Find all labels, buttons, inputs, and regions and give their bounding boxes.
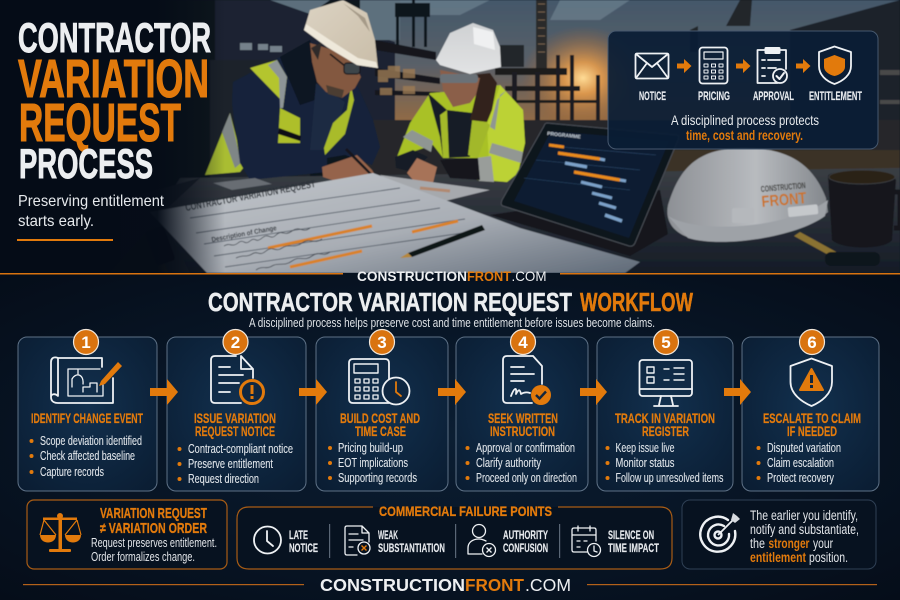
title: REQUEST NOTICE [195, 424, 275, 439]
hand and pen [322, 155, 375, 185]
left fade behind title [0, 0, 225, 273]
item: silence on time impact: SILENCE ON [608, 528, 654, 542]
arrow [796, 59, 810, 73]
icon: notice document with alert [211, 356, 264, 404]
lower section backing [0, 273, 900, 600]
callout: notice to entitlement [608, 31, 878, 149]
vest straps [250, 60, 287, 108]
callout message: A disciplined process protects [671, 112, 819, 128]
face [310, 43, 361, 98]
callout message [671, 112, 819, 143]
footer brand with rules [23, 575, 877, 595]
arrow [736, 59, 750, 73]
message: the [750, 536, 765, 551]
icon: calculator and clock [349, 359, 410, 404]
item: late notice [254, 526, 318, 555]
hero photo: site scene with two engineers [0, 0, 900, 273]
helmet [436, 23, 501, 74]
title [488, 411, 558, 439]
panel heading [100, 506, 207, 537]
badge 6: 6 [807, 333, 817, 352]
bullets: Request direction [188, 472, 259, 486]
panel: commercial failure points [237, 503, 672, 569]
footer brand with rules: CONSTRUCTION [320, 575, 465, 595]
icon: shield [819, 46, 851, 84]
callout message: time, cost and recovery. [686, 127, 803, 143]
title: ESCALATE TO CLAIM [763, 411, 861, 426]
brand strip with rule: .COM [512, 268, 546, 284]
second sheet under the woman's hand [380, 175, 490, 203]
bullets: Contract-compliant notice [188, 442, 293, 456]
bullets [30, 434, 142, 479]
step labels: NOTICE [639, 89, 666, 103]
icon: calculator [700, 48, 728, 84]
bullets: Protect recovery [767, 471, 835, 485]
hair and face [470, 73, 497, 122]
message: entitlement [750, 550, 806, 565]
item: weak substantiation [345, 526, 445, 555]
workflow subheading: A disciplined process helps preserve cost and time entitlement before issues become claims. [249, 316, 655, 330]
far-left building behind man [215, 0, 395, 130]
title: REGISTER [642, 424, 689, 439]
message: notify and substantiate, [750, 522, 859, 537]
title: IF NEEDED [787, 424, 837, 439]
bullets: Preserve entitlement [188, 457, 273, 471]
icon: blueprint with pencil [51, 357, 122, 403]
tablet stand [490, 190, 668, 256]
hero subtitle: starts early. [18, 213, 94, 230]
variation request form [150, 173, 640, 273]
panel heading: VARIATION REQUEST [100, 506, 207, 522]
icon: register monitor [640, 360, 692, 406]
title: ISSUE VARIATION [194, 411, 276, 426]
bullets: EOT implications [338, 456, 408, 470]
pen [408, 225, 485, 257]
footer brand with rules: FRONT [465, 575, 524, 595]
panel: earlier is stronger [682, 500, 876, 569]
badge 3 [370, 330, 394, 354]
bullets: Follow up unresolved items [616, 471, 724, 485]
hero title: PROCESS [19, 140, 153, 187]
icon: target [700, 513, 740, 552]
hand [407, 158, 437, 183]
bullets: Clarify authority [476, 456, 542, 470]
step 3 card [316, 330, 448, 491]
item: silence on time impact [572, 526, 659, 556]
item: silence on time impact: TIME IMPACT [608, 541, 659, 555]
arrows between steps [150, 379, 751, 405]
item: late notice: LATE [289, 528, 308, 542]
steel frames left of woman [375, 40, 440, 96]
bullets: Pricing build-up [338, 441, 403, 455]
bullets: Claim escalation [767, 456, 834, 470]
badge 1: 1 [81, 333, 91, 352]
bullets: Scope deviation identified [40, 434, 142, 448]
workflow heading: CONTRACTOR VARIATION REQUEST [208, 289, 572, 317]
branded hard hat on table: FRONT [761, 190, 807, 211]
icon: shield with warning [790, 358, 832, 406]
message: stronger [768, 536, 810, 551]
badge 4 [510, 330, 536, 354]
step 2 card [167, 330, 306, 491]
item: weak substantiation: WEAK [378, 528, 398, 542]
item: authority confusion: CONFUSION [503, 541, 548, 555]
hero subtitle [18, 193, 165, 230]
man in hard hat [205, 0, 385, 187]
badge 2: 2 [231, 333, 240, 352]
brand strip with rule [0, 268, 900, 284]
bullets: Supporting records [338, 471, 417, 485]
title: TRACK IN VARIATION [615, 411, 715, 426]
workflow heading: WORKFLOW [580, 289, 694, 317]
arrow [677, 59, 692, 73]
panel heading: COMMERCIAL FAILURE POINTS [379, 503, 552, 519]
bullets: Proceed only on direction [476, 471, 577, 485]
mid ground [360, 120, 900, 180]
message: The earlier you identify, [750, 508, 858, 523]
title: IDENTIFY CHANGE EVENT [31, 411, 143, 426]
title [340, 411, 420, 439]
vest back panel [205, 113, 244, 175]
item: weak substantiation: SUBSTANTIATION [378, 541, 445, 555]
panel: request vs order [27, 500, 227, 569]
title: SEEK WRITTEN [488, 411, 558, 426]
badge 3: 3 [377, 333, 387, 352]
hero title: CONTRACTOR [18, 14, 211, 61]
badge 5 [654, 330, 678, 354]
badge 6 [800, 330, 824, 354]
item: authority confusion: AUTHORITY [503, 528, 548, 542]
step labels: ENTITLEMENT [809, 89, 862, 103]
bullets: Check affected baseline [40, 449, 135, 463]
hero title: REQUEST [19, 93, 181, 153]
bullets [178, 442, 293, 486]
hero title [18, 14, 211, 187]
title [194, 411, 276, 439]
item: late notice: NOTICE [289, 541, 318, 555]
bullets: Disputed variation [767, 441, 841, 455]
message: position. [809, 550, 848, 565]
title: TIME CASE [355, 424, 406, 439]
icon: scales [40, 513, 81, 552]
badge 2 [223, 330, 248, 354]
message [750, 508, 859, 565]
brand strip with rule: CONSTRUCTION [357, 268, 467, 284]
tablet with programme gantt: PROGRAMME [547, 131, 582, 141]
hero photo: site scene with two engineers: CONTRACTOR VARIATION REQUEST [185, 179, 316, 214]
badge 5: 5 [661, 333, 671, 352]
tablet with programme gantt [501, 123, 679, 246]
bullets [606, 441, 724, 485]
icon: envelope [636, 54, 668, 78]
step labels [639, 89, 862, 103]
step 5 card [597, 330, 733, 491]
small loose paper [213, 178, 272, 190]
title: BUILD COST AND [340, 411, 420, 426]
branded hard hat on table [667, 148, 828, 242]
title [615, 411, 715, 439]
right dark structure [790, 0, 900, 170]
bullets: Monitor status [616, 456, 674, 470]
brand strip with rule: FRONT [467, 268, 511, 284]
icon: clipboard approval [758, 48, 787, 83]
title [763, 411, 861, 439]
jacket [232, 40, 380, 180]
glasses [330, 54, 345, 66]
footer brand with rules: .COM [525, 575, 571, 595]
panel text [91, 535, 217, 564]
bullets: Keep issue live [616, 441, 675, 455]
title: INSTRUCTION [490, 424, 555, 439]
panel text: Order formalizes change. [91, 549, 195, 564]
bullets [466, 441, 577, 485]
bullets [756, 441, 841, 485]
hero photo: site scene with two engineers: Description of Change [211, 225, 277, 244]
bullets: Approval or confirmation [476, 441, 575, 455]
item: authority confusion [468, 524, 548, 556]
badge 1 [74, 330, 98, 354]
step labels: APPROVAL [753, 89, 794, 103]
panel heading: ≠ VARIATION ORDER [100, 521, 207, 537]
icon: signed document with check [503, 356, 551, 405]
woman in hi-vis jacket [395, 23, 525, 183]
branded hard hat on table: CONSTRUCTION [760, 180, 806, 194]
message: your [813, 536, 833, 551]
bullets [328, 441, 417, 485]
step 6 card [742, 330, 879, 491]
badge 4: 4 [518, 333, 528, 352]
crane tower and frame [536, 0, 547, 70]
hero subtitle: Preserving entitlement [18, 193, 165, 210]
panel text: Request preserves entitlement. [91, 535, 217, 550]
step labels: PRICING [698, 89, 730, 103]
hero title: VARIATION [18, 49, 209, 109]
coffee mug [828, 170, 900, 248]
step 1 card [18, 330, 157, 491]
step 4 card [456, 330, 588, 491]
table [120, 168, 900, 273]
helmet [304, 0, 378, 68]
bullets: Capture records [40, 465, 104, 479]
